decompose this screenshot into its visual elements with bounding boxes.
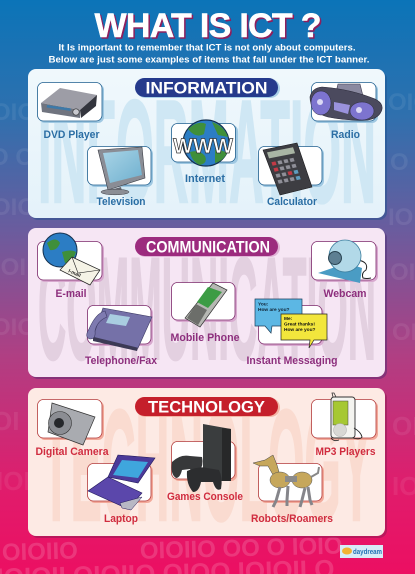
- item: instant messaging: [246, 299, 338, 367]
- heading: technology: TECHNOLOGY: [148, 398, 265, 416]
- binary pattern background: [0, 89, 415, 501]
- item: e-mail: I-mail: [67, 268, 82, 279]
- intro text: Below are just some examples of items that fall under the ICT banner.: [48, 54, 370, 66]
- item: internet: [172, 120, 238, 185]
- item: television: Television: [96, 196, 146, 208]
- binary pattern bottom: OIOIIO: [2, 537, 78, 566]
- item: calculator: Calculator: [267, 196, 318, 208]
- binary pattern bottom: [0, 530, 343, 574]
- item: laptop: [88, 455, 155, 525]
- item: telephone/fax: [85, 306, 158, 367]
- panel: communication: [28, 227, 387, 390]
- item: DVD player: DVD Player: [44, 129, 100, 141]
- logo: daydream: [340, 545, 383, 558]
- item: MP3 player: MP3 Players: [316, 446, 376, 458]
- panel: technology: [28, 378, 387, 554]
- item: instant messaging: You:: [258, 302, 269, 308]
- item: laptop: Laptop: [104, 513, 138, 525]
- item: robots: [251, 455, 333, 525]
- item: instant messaging: How are you?: [284, 327, 316, 333]
- item: television: [88, 146, 153, 208]
- item: webcam: Webcam: [324, 288, 367, 300]
- item: instant messaging: Me:: [284, 316, 293, 322]
- item: robots: Robots/Roamers: [251, 513, 333, 525]
- item: mobile phone: Mobile Phone: [170, 332, 240, 344]
- heading: information: INFORMATION: [146, 80, 268, 98]
- item: e-mail: [38, 233, 104, 300]
- intro text: [48, 42, 370, 66]
- item: internet: WWW: [173, 135, 233, 158]
- heading: communication: COMMUNICATION: [146, 238, 270, 256]
- item: instant messaging: Great thanks!: [284, 322, 315, 328]
- item: e-mail: E-mail: [56, 288, 86, 300]
- item: radio: [310, 82, 382, 141]
- item: telephone/fax: Telephone/Fax: [85, 355, 158, 367]
- item: internet: Internet: [185, 173, 225, 185]
- title: WHAT IS ICT ?: [96, 8, 323, 46]
- binary pattern bottom: OIOIIO OO O IOIO: [140, 532, 343, 565]
- logo: daydream: daydream: [353, 547, 382, 556]
- intro text: It Is important to remember that ICT is not only about computers.: [58, 42, 355, 54]
- item: mobile phone: [170, 282, 240, 344]
- title: WHAT IS ICT ?: [94, 7, 322, 45]
- item: instant messaging: Instant Messaging: [246, 355, 338, 367]
- item: MP3 player: [312, 393, 378, 458]
- item: games console: Games Console: [167, 491, 243, 503]
- item: calculator: [258, 143, 324, 208]
- item: digital camera: Digital Camera: [36, 446, 109, 458]
- item: digital camera: [36, 400, 109, 458]
- item: radio: Radio: [331, 129, 360, 141]
- item: instant messaging: How are you?: [258, 307, 290, 313]
- panel: information: [28, 69, 387, 233]
- item: games console: [167, 424, 243, 503]
- item: DVD player: [38, 82, 104, 141]
- item: webcam: [312, 240, 378, 300]
